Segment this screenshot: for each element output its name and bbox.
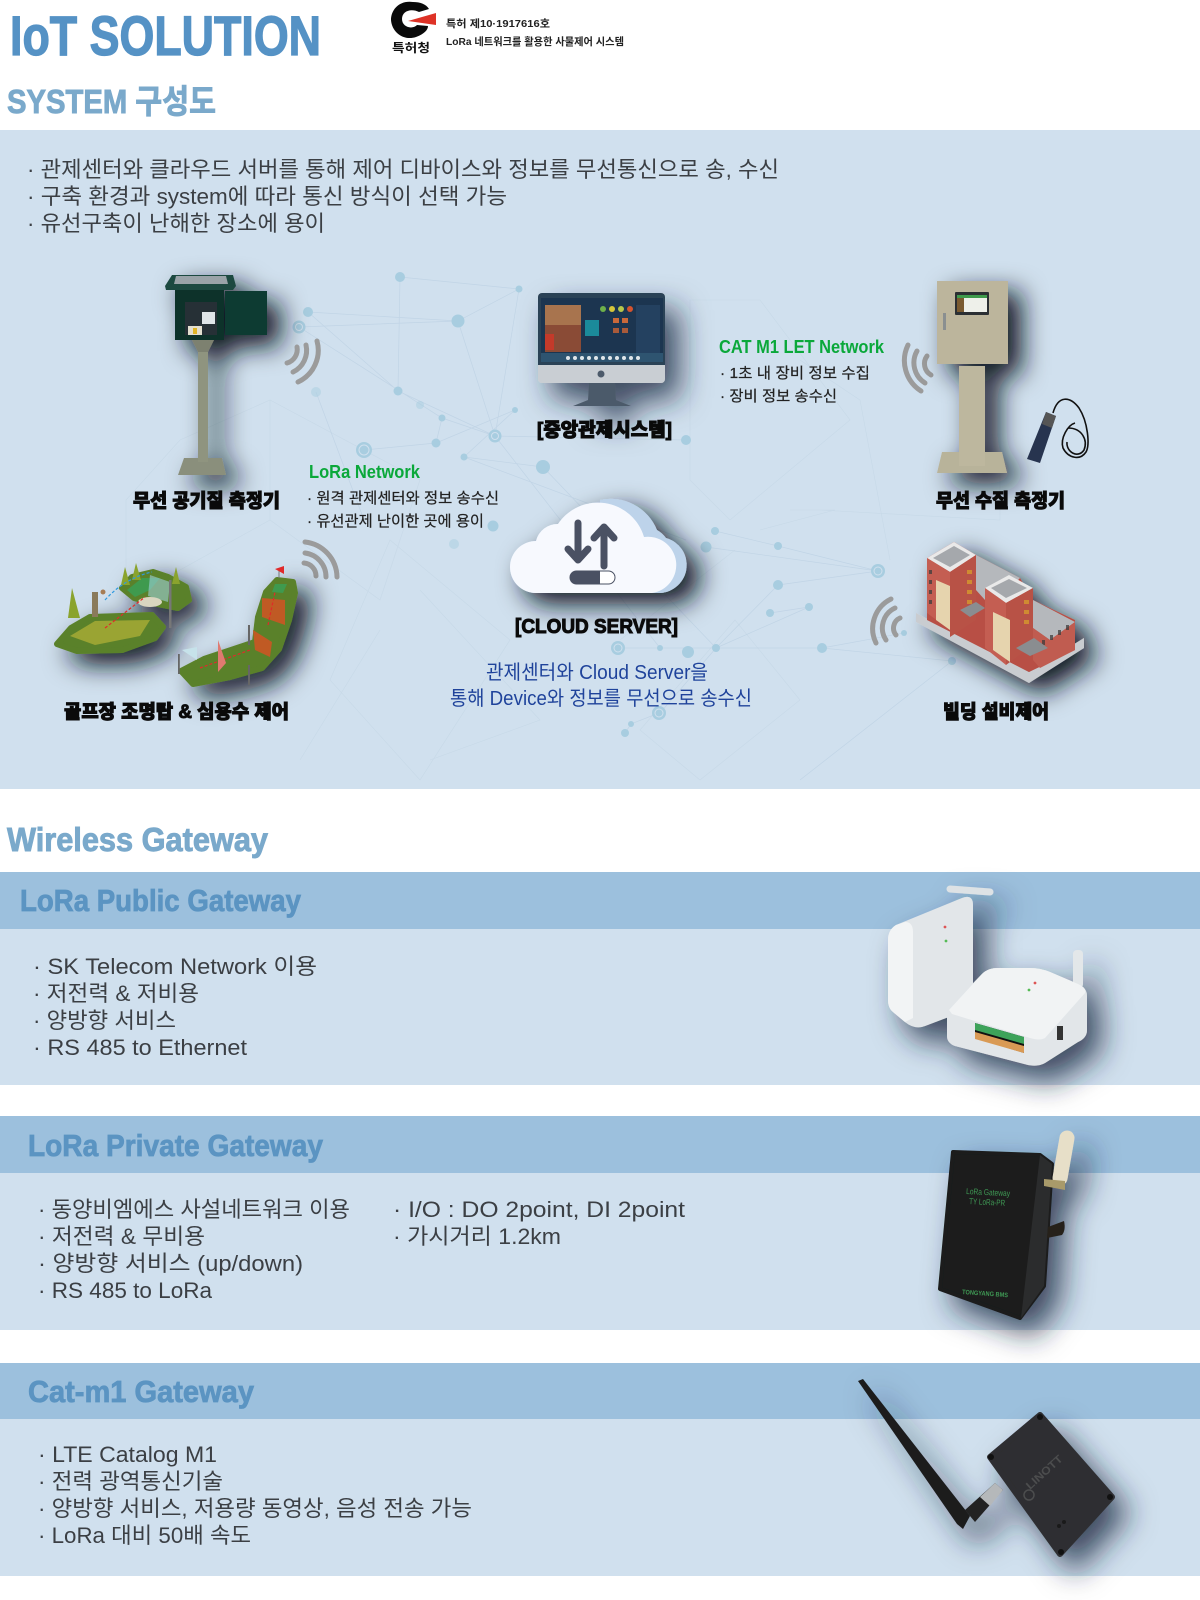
device: water sensor probe — [1027, 399, 1088, 463]
feature list: LoRa private left — [38, 1197, 350, 1303]
callout: LoRa network: LoRa Network — [309, 462, 421, 482]
caption: water quality meter: 무선 수질 측정기 — [936, 490, 1065, 512]
feature list: Cat-m1: · 양방향 서비스, 저용량 동영상, 음성 전송 가능 — [38, 1496, 472, 1521]
callout: CAT M1 network: CAT M1 LET Network — [719, 337, 885, 357]
bullet text: system summary: · 구축 환경과 system에 따라 통신 방식이 선택 가능 — [27, 184, 507, 209]
panel header: LoRa public gateway — [0, 872, 1200, 929]
feature list: LoRa private left: · 동양비엠에스 사설네트워크 이용 — [38, 1197, 350, 1222]
feature list: LoRa public: · RS 485 to Ethernet — [33, 1035, 247, 1060]
feature list: Cat-m1 — [38, 1442, 472, 1548]
feature list: LoRa public: · 양방향 서비스 — [33, 1008, 176, 1033]
icon: cloud server — [510, 499, 687, 593]
caption: building control: 빌딩 설비제어 — [943, 701, 1049, 723]
callout: CAT M1 network: · 장비 정보 송수신 — [720, 388, 837, 405]
feature list: LoRa public: · SK Telecom Network 이용 — [33, 954, 317, 979]
device: LoRa private gateway: TY LoRa-PR — [969, 1196, 1005, 1208]
feature list: LoRa private right — [393, 1197, 685, 1249]
network background — [126, 272, 1000, 780]
caption: golf course control: 골프장 조명탑 & 심용수 제어 — [64, 701, 289, 723]
heading: LoRa public gateway: LoRa Public Gateway — [20, 883, 302, 918]
panel: system diagram — [0, 130, 1200, 789]
device: central monitor — [538, 293, 665, 406]
patent logo — [391, 2, 436, 55]
device: Cat-m1 gateway — [858, 1379, 1113, 1555]
device: LoRa private gateway — [940, 1138, 1067, 1318]
feature list: LoRa private right: · I/O : DO 2point, DI 2point — [393, 1197, 685, 1222]
heading: LoRa private gateway: LoRa Private Gateway — [28, 1128, 324, 1163]
feature list: LoRa public: · 저전력 & 저비용 — [33, 981, 199, 1006]
callout: cloud description: 통해 Device와 정보를 무선으로 송수신 — [450, 687, 752, 710]
feature list: LoRa private left: · RS 485 to LoRa — [38, 1278, 213, 1303]
icon: wifi signal 3 — [304, 542, 337, 577]
callout: LoRa network — [307, 462, 499, 530]
caption: cloud server: [CLOUD SERVER] — [515, 616, 678, 638]
callout: CAT M1 network — [719, 337, 885, 405]
callout: cloud description: 관제센터와 Cloud Server을 — [486, 661, 708, 684]
panel: LoRa public gateway — [0, 872, 1200, 1085]
icon: wifi signal 2 — [904, 345, 931, 391]
feature list: LoRa private left: · 저전력 & 무비용 — [38, 1224, 205, 1249]
feature list: LoRa private right: · 가시거리 1.2km — [393, 1224, 561, 1249]
illustration: golf course — [57, 563, 295, 685]
bullet text: system summary — [27, 157, 779, 236]
title: IoT SOLUTION — [10, 4, 321, 67]
bullet text: system summary: · 유선구축이 난해한 장소에 용이 — [27, 211, 325, 236]
patent text — [446, 17, 624, 48]
device: LoRa public gateway — [888, 889, 1087, 1066]
panel header: Cat-m1 gateway — [0, 1363, 1200, 1419]
feature list: Cat-m1: · LoRa 대비 50배 속도 — [38, 1523, 251, 1548]
callout: LoRa network: · 원격 관제센터와 정보 송수신 — [307, 490, 499, 507]
panel: LoRa private gateway — [0, 1116, 1200, 1330]
heading: system: SYSTEM 구성도 — [7, 83, 216, 120]
caption: air quality meter: 무선 공기질 측정기 — [133, 490, 280, 512]
callout: LoRa network: · 유선관제 난이한 곳에 용이 — [307, 513, 484, 530]
heading: Cat-m1 gateway: Cat-m1 Gateway — [28, 1374, 255, 1409]
patent text: 특허 제10·1917616호 — [446, 17, 550, 30]
callout: CAT M1 network: · 1초 내 장비 정보 수집 — [720, 365, 870, 382]
illustration: building — [916, 542, 1084, 683]
panel header: LoRa private gateway — [0, 1116, 1200, 1173]
device: wireless air quality meter — [165, 275, 267, 475]
caption: central control system: [중앙관제시스템] — [537, 419, 672, 441]
panel: Cat-m1 gateway — [0, 1363, 1200, 1576]
feature list: Cat-m1: · 전력 광역통신기술 — [38, 1469, 223, 1494]
feature list: LoRa private left: · 양방향 서비스 (up/down) — [38, 1251, 303, 1276]
device: LoRa private gateway: TONGYANG BMS — [962, 1289, 1009, 1299]
feature list: Cat-m1: · LTE Catalog M1 — [38, 1442, 217, 1467]
icon: wifi signal 4 — [873, 599, 900, 643]
device: wireless water quality meter — [937, 281, 1008, 473]
heading: wireless gateway: Wireless Gateway — [7, 821, 269, 858]
patent text: LoRa 네트워크를 활용한 사물제어 시스템 — [446, 35, 624, 48]
icon: wifi signal 1 — [287, 341, 318, 382]
patent logo: 특허청 — [392, 40, 430, 55]
callout: cloud description — [450, 661, 752, 710]
feature list: LoRa public — [33, 954, 317, 1060]
device: Cat-m1 gateway: LINOTT — [1024, 1453, 1066, 1492]
bullet text: system summary: · 관제센터와 클라우드 서버를 통해 제어 디바이스와 정보를 무선통신으로 송, 수신 — [27, 157, 779, 182]
device: LoRa private gateway: LoRa Gateway — [966, 1186, 1011, 1198]
